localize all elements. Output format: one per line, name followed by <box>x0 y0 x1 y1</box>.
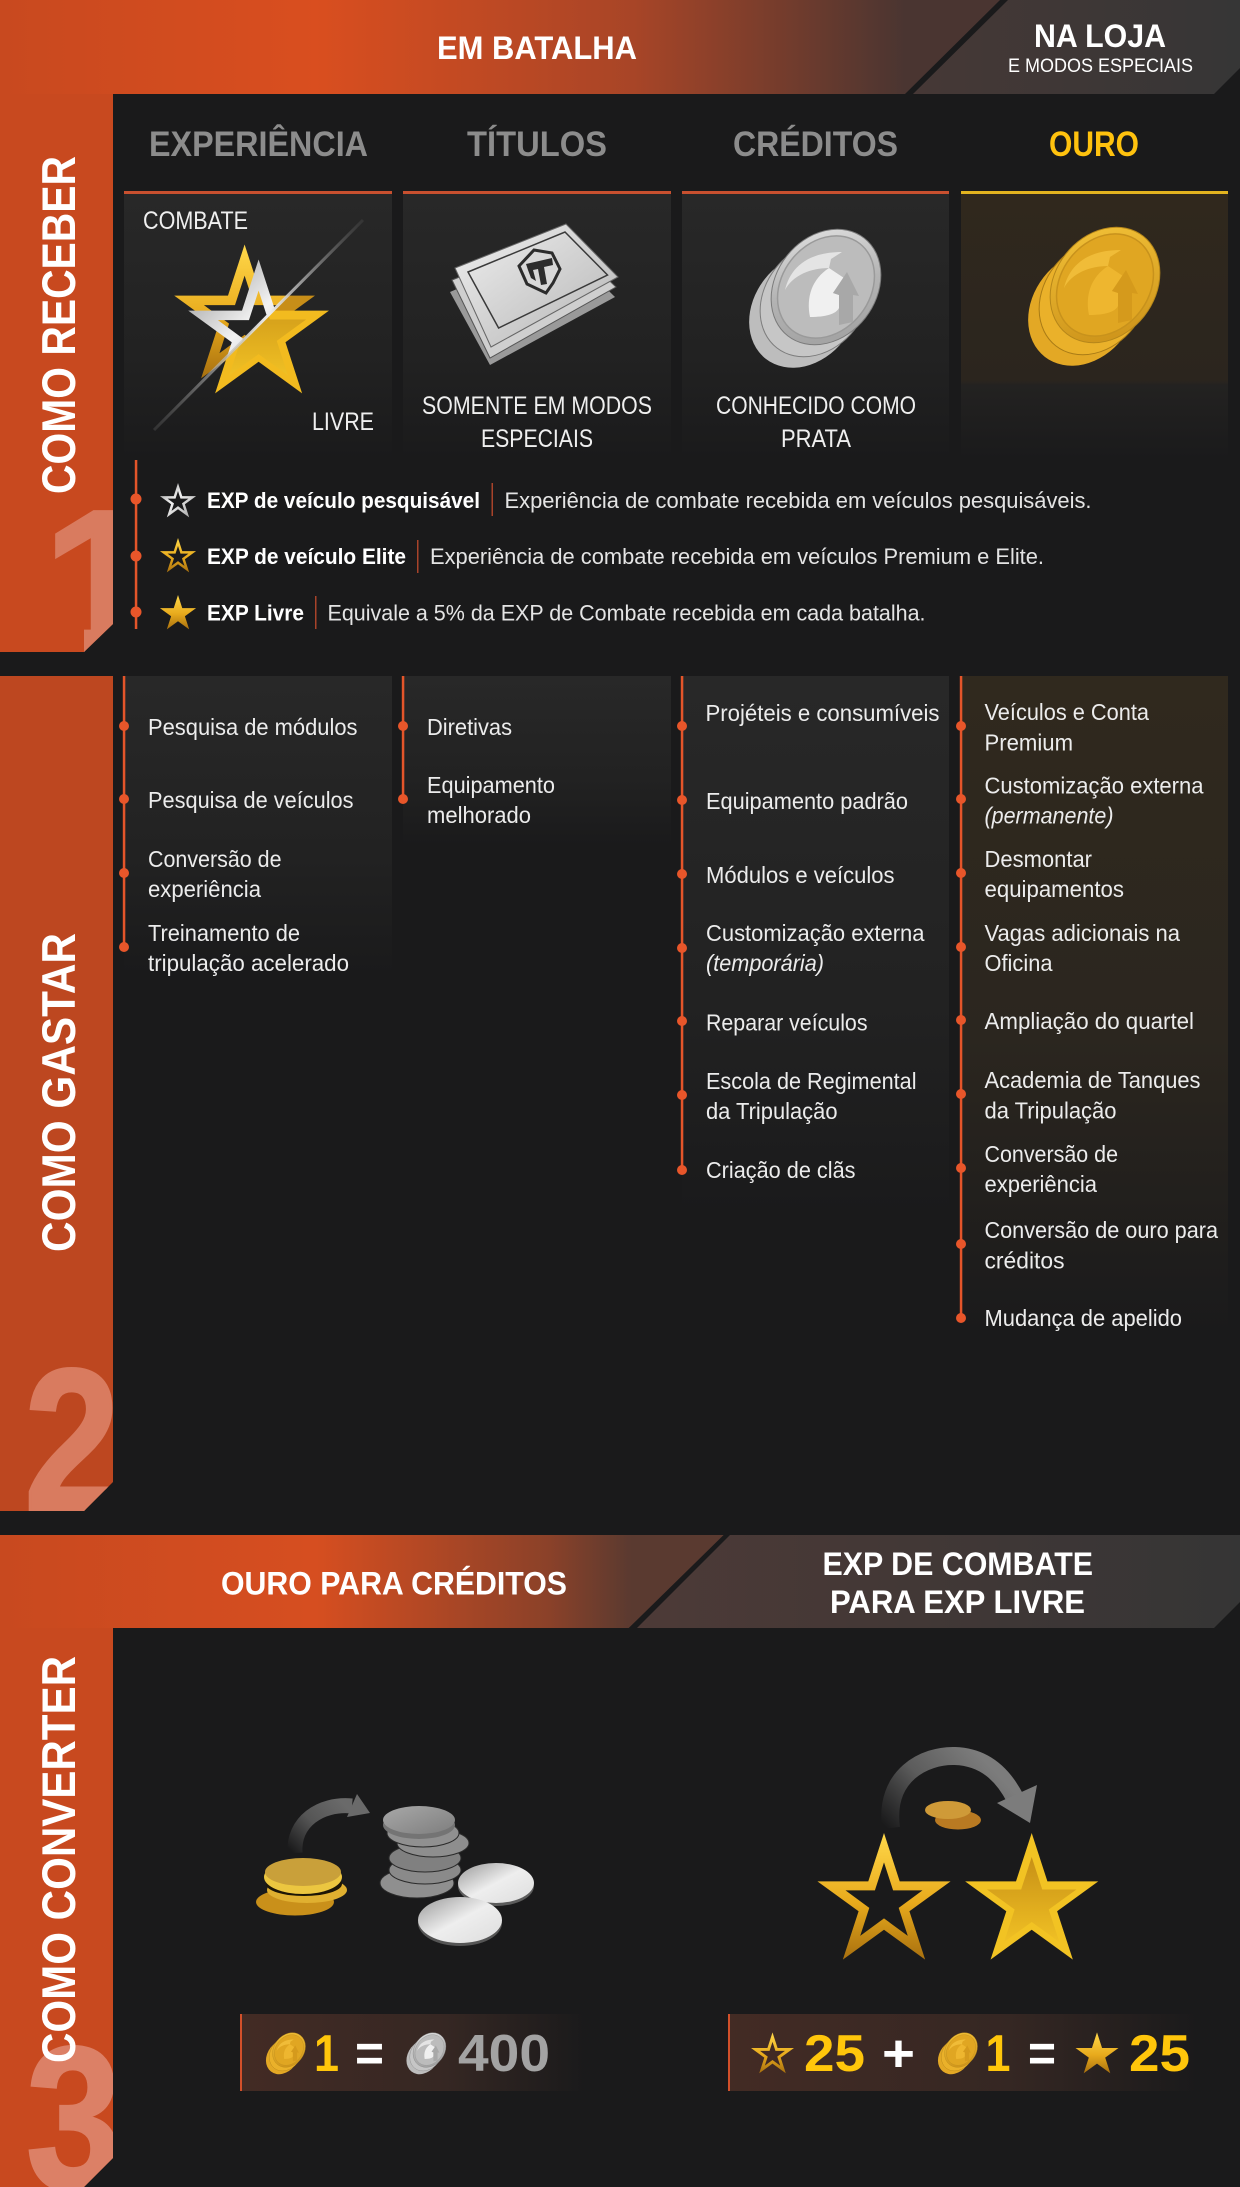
illustration: gold to silver coins <box>256 1794 534 1946</box>
icon: silver coins <box>726 207 904 390</box>
section 2: como gastar <box>0 676 1228 1555</box>
icon: outline star <box>751 2032 794 2073</box>
column heading: ouro: OURO <box>1049 125 1139 164</box>
column heading: titulos: TÍTULOS <box>467 124 607 164</box>
column: experiencia uses: Pesquisa de módulos <box>148 714 358 740</box>
equation: exp to free exp: 25 <box>1129 2025 1190 2083</box>
icon: gold coin <box>259 2026 312 2081</box>
row: exp de veiculo elite: Experiência de combate recebida em veículos Premium e Elite. <box>430 544 1044 569</box>
column: ouro uses: Ampliação do quartel <box>984 1008 1194 1034</box>
header band: em batalha <box>0 0 1000 94</box>
label: livre: LIVRE <box>312 408 374 436</box>
column: ouro uses: Premium <box>984 730 1073 756</box>
panel: titulos <box>403 191 671 460</box>
icon: filled star <box>1076 2032 1118 2073</box>
column: ouro uses: Academia de Tanques <box>984 1067 1200 1093</box>
label: conhecido como prata: PRATA <box>781 425 851 453</box>
equation: gold to credits: 400 <box>458 2025 550 2083</box>
label: conhecido como prata: CONHECIDO COMO <box>716 392 916 420</box>
equation: exp to free exp: + <box>882 2025 915 2083</box>
column: creditos uses: Projéteis e consumíveis <box>706 700 940 726</box>
arrow: combat to free <box>890 1756 1037 1828</box>
column: creditos uses: Módulos e veículos <box>706 862 894 888</box>
header band: na loja <box>913 0 1240 94</box>
column: titulos uses: Diretivas <box>427 714 512 740</box>
side band: como receber <box>0 94 113 652</box>
side band: como converter: COMO CONVERTER <box>32 1656 85 2063</box>
side band: como converter <box>0 1628 113 2187</box>
header band: na loja: NA LOJA <box>1034 18 1166 54</box>
column: experiencia uses: tripulação acelerado <box>148 950 349 976</box>
experience types list <box>130 460 1092 629</box>
icon: gold coins <box>1005 205 1183 388</box>
panel: experiencia <box>124 191 392 431</box>
row: exp de veiculo pesquisavel: Experiência de combate recebida em veículos pesquisáveis. <box>504 488 1092 513</box>
equation: exp to free exp: 1 <box>986 2025 1010 2083</box>
equation: exp to free exp <box>728 2014 1198 2091</box>
header band: ouro para creditos <box>0 1535 724 1628</box>
column: ouro uses: Oficina <box>984 950 1053 976</box>
icon: gold coin <box>931 2026 984 2081</box>
column: ouro uses: da Tripulação <box>984 1098 1116 1124</box>
row: exp de veiculo elite: EXP de veículo Elite <box>207 544 406 569</box>
arrow: gold to credits <box>295 1794 370 1853</box>
column: ouro uses: experiência <box>984 1171 1097 1197</box>
column: titulos uses <box>398 676 671 846</box>
equation: gold to credits: = <box>355 2025 384 2083</box>
column: experiencia uses <box>119 676 392 976</box>
row: exp de veiculo elite <box>160 538 1044 573</box>
row: exp de veiculo pesquisavel: EXP de veículo pesquisável <box>207 488 480 513</box>
column: ouro uses: Mudança de apelido <box>984 1305 1182 1331</box>
section 3: como converter <box>0 1535 1240 2187</box>
side band: como gastar <box>0 676 113 1511</box>
column: creditos uses: Reparar veículos <box>706 1010 868 1036</box>
section 1: como receber <box>0 0 1240 696</box>
icon: outline star <box>817 1833 951 1960</box>
icon: silver coin <box>400 2026 453 2081</box>
row: exp livre: EXP Livre <box>207 600 304 626</box>
column: creditos uses: Escola de Regimental <box>706 1068 916 1094</box>
icon: gold stack <box>256 1858 347 1916</box>
column: titulos uses: Equipamento <box>427 772 555 798</box>
column: ouro uses: Customização externa <box>984 772 1204 798</box>
side band: como receber: COMO RECEBER <box>32 156 85 494</box>
row: exp de veiculo pesquisavel <box>160 483 1091 517</box>
row: exp livre <box>160 595 925 629</box>
illustration: stars with gold <box>817 1756 1098 1960</box>
column: ouro uses: Conversão de ouro para <box>984 1217 1218 1243</box>
column: ouro uses: créditos <box>984 1248 1064 1274</box>
icon: flat silver coins <box>418 1863 534 1946</box>
label: somente em modos especiais: SOMENTE EM MODOS <box>422 392 652 420</box>
column: ouro uses <box>956 676 1228 1336</box>
column: ouro uses: (permanente) <box>984 802 1114 828</box>
equation: gold to credits: 1 <box>314 2025 339 2083</box>
column: experiencia uses: experiência <box>148 876 261 902</box>
column: creditos uses: da Tripulação <box>706 1098 838 1124</box>
column heading: creditos: CRÉDITOS <box>733 124 898 164</box>
column: creditos uses: (temporária) <box>706 950 824 976</box>
column: creditos uses: Criação de clãs <box>706 1157 856 1183</box>
header band: ouro para creditos: OURO PARA CRÉDITOS <box>221 1566 567 1602</box>
column: ouro uses: Veículos e Conta <box>984 699 1149 725</box>
header band: exp de combate para exp livre: PARA EXP LIVRE <box>830 1584 1085 1620</box>
column: experiencia uses: Conversão de <box>148 846 282 872</box>
side band: como gastar: COMO GASTAR <box>32 933 85 1252</box>
row: exp livre: Equivale a 5% da EXP de Combate recebida em cada batalha. <box>328 600 926 626</box>
column: experiencia uses: Pesquisa de veículos <box>148 787 354 813</box>
label: conhecido como prata <box>716 392 916 453</box>
icon: bills <box>450 224 618 365</box>
header band: na loja: E MODOS ESPECIAIS <box>1008 56 1193 77</box>
panel: creditos <box>682 191 949 460</box>
column: ouro uses: Vagas adicionais na <box>984 920 1180 946</box>
icon: filled star <box>965 1833 1098 1960</box>
column: ouro uses: equipamentos <box>984 876 1124 902</box>
equation: gold to credits <box>240 2014 585 2091</box>
label: somente em modos especiais: ESPECIAIS <box>481 425 593 453</box>
equation: exp to free exp: 25 <box>804 2025 865 2083</box>
column: creditos uses <box>677 676 949 1216</box>
column: experiencia uses: Treinamento de <box>148 920 300 946</box>
label: combate: COMBATE <box>143 207 248 235</box>
icon: silver stack <box>380 1806 469 1898</box>
side band: como receber: 1 <box>42 468 162 696</box>
icon: small gold stack <box>925 1801 981 1830</box>
column: ouro uses: Conversão de <box>984 1141 1118 1167</box>
column: titulos uses: melhorado <box>427 802 531 828</box>
icon: combat and free star <box>154 220 363 430</box>
header band: exp de combate para exp livre: EXP DE COMBATE <box>822 1546 1093 1582</box>
column: ouro uses: Desmontar <box>984 846 1092 872</box>
equation: exp to free exp: = <box>1028 2025 1056 2083</box>
column: creditos uses: Customização externa <box>706 920 925 946</box>
header band: em batalha: EM BATALHA <box>437 30 637 66</box>
side band: como gastar: 2 <box>24 1327 120 1555</box>
header band: exp de combate para exp livre <box>637 1535 1240 1628</box>
label: somente em modos especiais <box>422 392 652 453</box>
column heading: experiencia: EXPERIÊNCIA <box>149 124 368 164</box>
panel: ouro <box>961 191 1228 460</box>
column: creditos uses: Equipamento padrão <box>706 788 908 814</box>
